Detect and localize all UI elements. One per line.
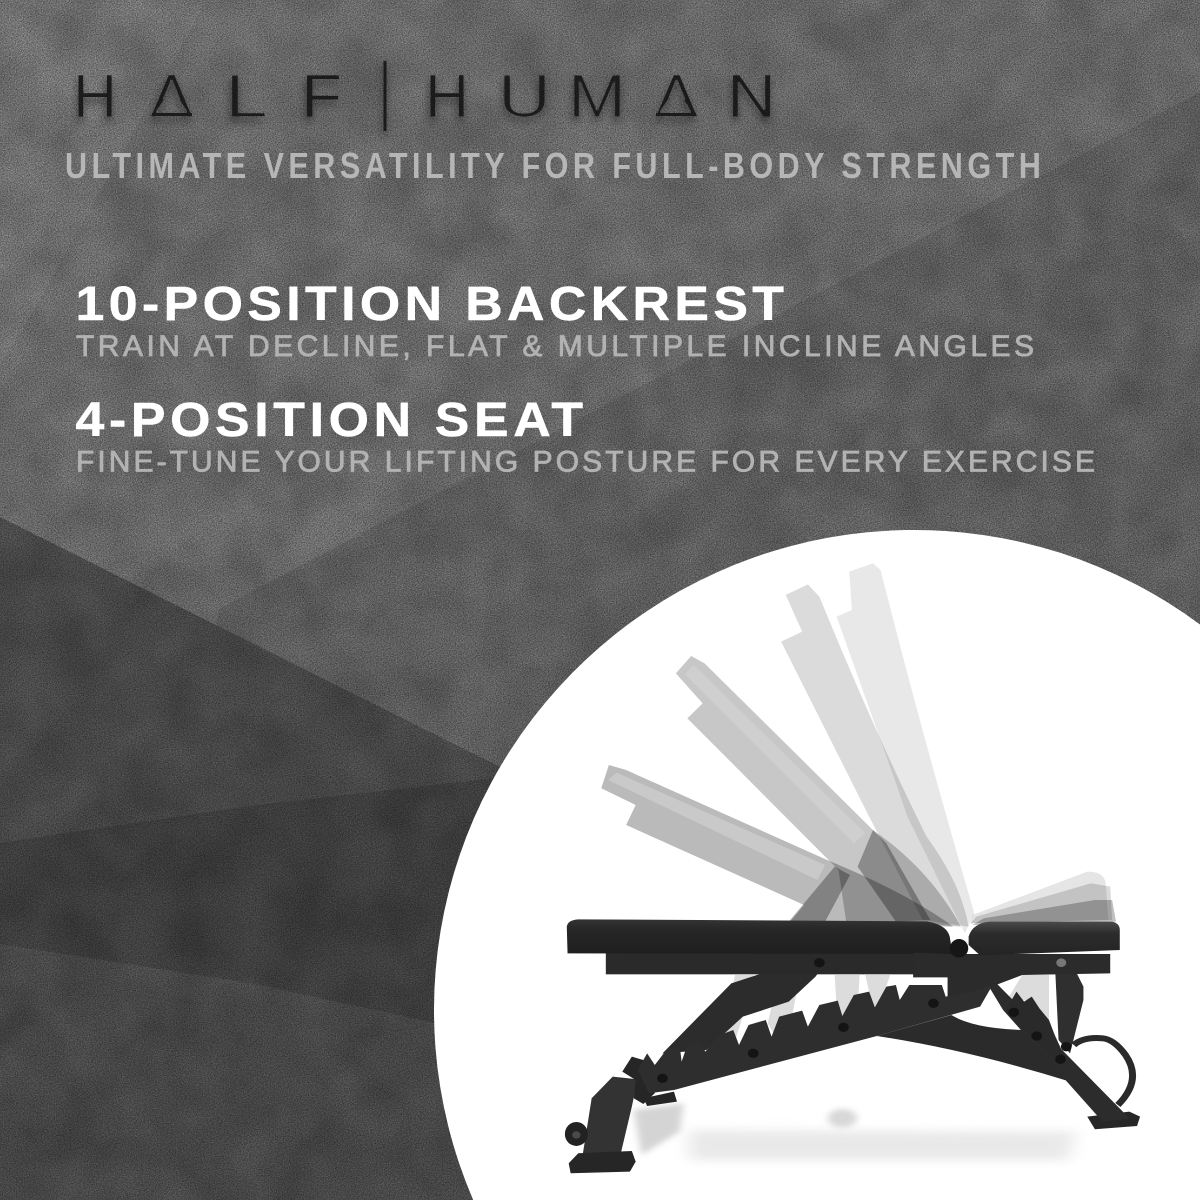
ghost position 3 (781, 584, 969, 927)
brand logo: HALF | HUMAN (73, 60, 776, 132)
front hinge bracket (622, 1057, 655, 1104)
white circle panel (434, 530, 1200, 1200)
feature 2 description: FINE-TUNE YOUR LIFTING POSTURE FOR EVERY EXERCISE (76, 446, 1095, 478)
ghost pad light faces (608, 773, 825, 880)
frame bolts (572, 958, 1072, 1139)
floor shadow (634, 1103, 1076, 1160)
logo triangular letter A (652, 75, 698, 126)
bench product illustration (565, 563, 1140, 1173)
hinge brackets (789, 830, 930, 922)
light ghost frame under the bench (708, 975, 1049, 1050)
logo letter F: F (301, 62, 342, 130)
feature 1 description: TRAIN AT DECLINE, FLAT & MULTIPLE INCLINE ANGLES (76, 330, 1034, 363)
front rail foot (643, 1092, 677, 1106)
front foot pad (569, 1151, 636, 1173)
hinge frame (913, 954, 1110, 997)
logo letter N: N (727, 62, 776, 130)
logo triangular letter A: A (150, 62, 193, 130)
logo letter H: H (425, 62, 469, 130)
backrest underframe (606, 953, 914, 974)
ghost position 2 (676, 656, 961, 927)
logo divider (382, 60, 388, 132)
logo triangular letter A (148, 75, 194, 126)
rear support brace (877, 1015, 1070, 1082)
backrest support arm (662, 958, 825, 1053)
hinge pivot (950, 939, 968, 958)
feature 1 heading: 10-POSITION BACKREST (76, 277, 784, 331)
seat support post (1055, 960, 1083, 1053)
seat motion ghosts (971, 872, 1116, 925)
rear leg (984, 978, 1129, 1122)
backrest cushion (567, 919, 953, 954)
toothed adjustment rail (638, 985, 992, 1093)
backrest motion fan (601, 563, 1116, 933)
logo letter M: M (568, 62, 626, 130)
logo triangular letter A: A (655, 62, 698, 130)
feature 2 heading: 4-POSITION SEAT (76, 393, 583, 447)
logo letter U: U (498, 62, 551, 130)
resistance handle (1074, 1038, 1133, 1105)
front upright leg (581, 1077, 638, 1163)
logo letter L: L (225, 62, 268, 130)
ghost position 4 (steepest) (837, 563, 974, 933)
tagline: ULTIMATE VERSATILITY FOR FULL-BODY STRENGTH (65, 147, 1041, 187)
wheel (565, 1122, 588, 1146)
seat cushion (969, 922, 1120, 955)
logo letter H: H (73, 62, 117, 130)
ghost position 1 (601, 765, 953, 927)
rear foot pad (1087, 1112, 1140, 1129)
rear toothed bracket (1005, 992, 1066, 1060)
solid bench (565, 919, 1140, 1173)
